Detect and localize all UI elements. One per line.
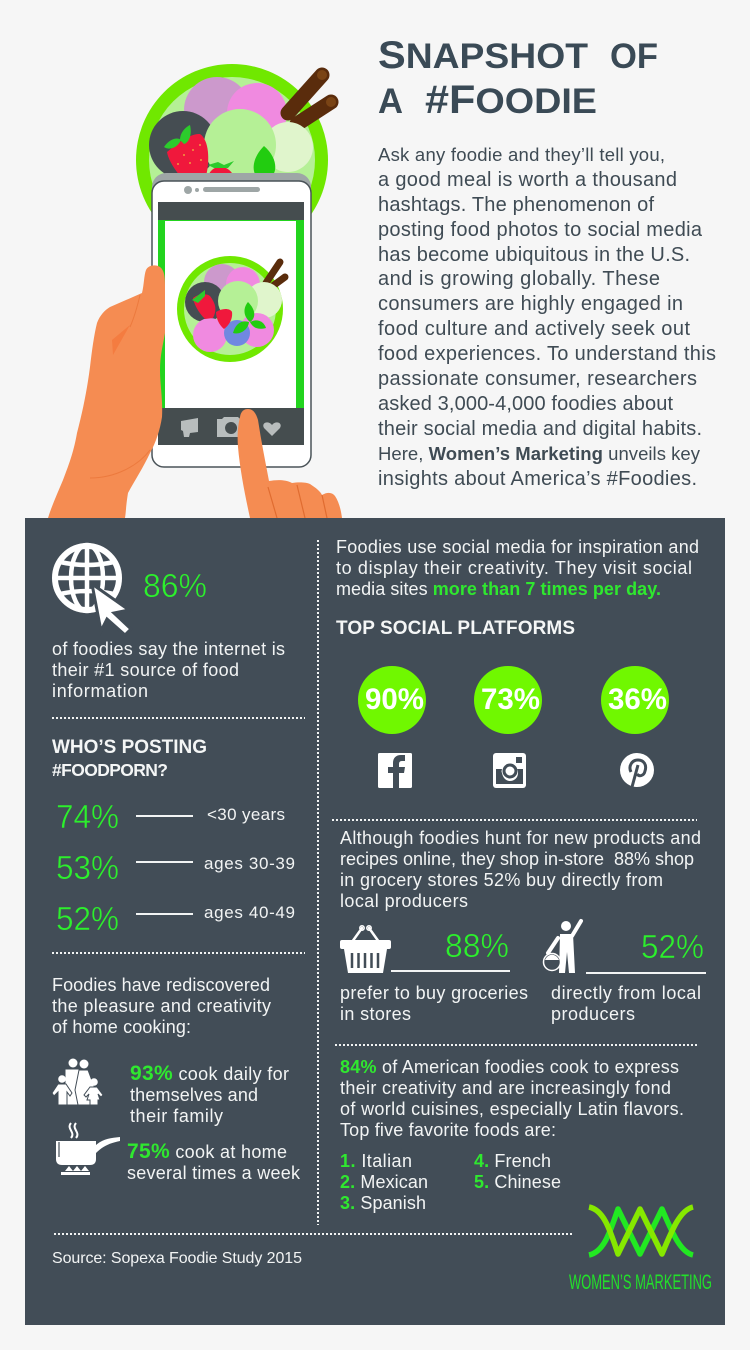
intro text: and is growing globally. These: [378, 268, 660, 290]
icon: pointing hand: [238, 409, 342, 518]
icon: Facebook: [378, 753, 412, 788]
text: 75% cook at home: [127, 1140, 301, 1183]
text: home cooking intro: of home cooking:: [52, 1017, 191, 1037]
panel: social media intro: media sites more than 7 times per day.: [336, 579, 661, 599]
icon: megaphone: [181, 418, 198, 437]
text: shopping intro: local producers: [340, 891, 468, 911]
heading: #FOODPORN?: [52, 760, 168, 780]
stat: ages 40-49: ages 40-49: [204, 903, 295, 922]
logo: Women's Marketing: [569, 1207, 712, 1294]
text: 75% cook at home: 75% cook at home: [127, 1140, 287, 1163]
stat: under 30: [56, 798, 285, 835]
intro text: their social media and digital habits.: [378, 418, 702, 440]
stat: 52% local producers: directly from local: [551, 983, 701, 1003]
icon: person with basket: [544, 921, 581, 973]
icon: cooking pot on flame: [56, 1123, 120, 1175]
intro text: asked 3,000-4,000 foodies about: [378, 393, 673, 415]
badge: Facebook 90%: [358, 666, 426, 734]
text: world cuisines: of world cuisines, especially Latin flavors.: [340, 1099, 684, 1119]
panel: who's posting: [52, 737, 295, 937]
stat: ages 30-39: ages 30-39: [204, 854, 295, 873]
text: home cooking intro: the pleasure and creativity: [52, 996, 271, 1016]
text: world cuisines: Top five favorite foods are:: [340, 1120, 556, 1140]
chart: social platform percentages: [358, 666, 669, 788]
title: [378, 34, 658, 122]
stat: 88% in stores: in stores: [340, 1004, 411, 1024]
text: 93% cook daily: 93% cook daily for: [130, 1062, 289, 1085]
badge: Pinterest 36%: 36%: [608, 683, 667, 716]
stat: ages 30-39: [56, 849, 295, 886]
heading: [52, 737, 207, 780]
panel: internet stat: [52, 545, 285, 701]
title: SNAPSHOT: [378, 34, 588, 77]
intro text: posting food photos to social media: [378, 219, 703, 241]
intro text: Here, Women’s Marketing unveils key: [378, 443, 701, 464]
badge: Instagram 73%: 73%: [481, 683, 540, 716]
list: top five foods: 5. Chinese: [474, 1172, 561, 1192]
stat: 88% in stores: 88%: [445, 927, 509, 964]
text: 93% cook daily: their family: [130, 1106, 223, 1126]
text: internet source: of foodies say the internet is: [52, 639, 285, 659]
title: OF: [610, 37, 658, 76]
text: shopping intro: [340, 828, 701, 911]
list: top five foods: 2. Mexican: [340, 1172, 428, 1192]
panel: dark stats background: [25, 518, 725, 1325]
stat: 88% in stores: prefer to buy groceries: [340, 983, 528, 1003]
panel: social media intro: to display their creativity. They visit social: [336, 558, 692, 578]
icon: food bowl: [136, 64, 336, 256]
intro text: a good meal is worth a thousand: [378, 169, 677, 191]
stat: 52% local producers: producers: [551, 1004, 635, 1024]
list: top five foods: 1. Italian: [340, 1151, 412, 1171]
text: internet source: their #1 source of food: [52, 660, 239, 680]
stat: 86%: 86%: [143, 567, 207, 604]
panel: shopping habits: [340, 828, 706, 1024]
icon: left hand: [48, 265, 165, 518]
text: home cooking intro: [52, 975, 271, 1037]
intro text: Ask any foodie and they’ll tell you,: [378, 144, 665, 165]
icon: heart: [263, 422, 281, 436]
stat: ages 40-49: 52%: [56, 900, 119, 937]
badge: Facebook 90%: 90%: [365, 683, 424, 716]
icon: Instagram: [493, 753, 526, 788]
text: internet source: information: [52, 681, 148, 701]
stat: 52% local producers: 52%: [641, 928, 704, 965]
title: #FOODIE: [425, 78, 597, 122]
text: internet source: [52, 639, 285, 701]
title: A: [378, 82, 403, 121]
text: shopping intro: Although foodies hunt for new products and: [340, 828, 701, 848]
intro text: consumers are highly engaged in: [378, 293, 683, 315]
text: world cuisines: [340, 1057, 684, 1140]
heading: top social platforms: TOP SOCIAL PLATFORMS: [336, 618, 575, 639]
text: 93% cook daily: themselves and: [130, 1085, 258, 1105]
logo mark: [589, 1207, 693, 1255]
source note: Source: Sopexa Foodie Study 2015: [52, 1250, 302, 1267]
panel: home cooking: [52, 975, 301, 1183]
badge: Instagram 73%: [474, 666, 542, 734]
panel: social media intro: [336, 537, 699, 599]
list: top five foods: 4. French: [474, 1151, 551, 1171]
illustration: hand holding phone photographing a food bowl: [48, 64, 342, 518]
stat: under 30: <30 years: [207, 805, 285, 824]
icon: globe with cursor: [55, 545, 131, 635]
stat: ages 40-49: [56, 900, 295, 937]
panel: social media intro: Foodies use social media for inspiration and: [336, 537, 699, 557]
heading: WHO’S POSTING: [52, 737, 207, 758]
text: shopping intro: in grocery stores 52% buy directly from: [340, 870, 663, 890]
intro text: passionate consumer, researchers: [378, 368, 697, 390]
text: 75% cook at home: several times a week: [127, 1163, 301, 1183]
intro text: has become ubiquitous in the U.S.: [378, 244, 690, 266]
list: top five foods: 3. Spanish: [340, 1193, 426, 1213]
icon: Pinterest: [620, 753, 654, 787]
text: world cuisines: their creativity and are increasingly fond: [340, 1078, 671, 1098]
icon: shopping basket: [340, 926, 391, 973]
stat: under 30: 74%: [56, 798, 119, 835]
stat: 52% local producers: [551, 928, 706, 1024]
badge: Pinterest 36%: [601, 666, 669, 734]
list: top five foods: [340, 1151, 561, 1213]
intro text: food experiences. To understand this: [378, 343, 716, 365]
text: shopping intro: recipes online, they shop in-store 88% shop: [340, 849, 694, 869]
icon: screen food photo: [177, 256, 285, 362]
panel: favorite foods: [340, 1057, 684, 1213]
stat: ages 30-39: 53%: [56, 849, 119, 886]
icon: family: [52, 1058, 103, 1105]
intro text: hashtags. The phenomenon of: [378, 194, 654, 216]
intro text: insights about America’s #Foodies.: [378, 468, 697, 490]
stat: 88% in stores: [340, 927, 528, 1024]
text: world cuisines: 84% of American foodies cook to express: [340, 1057, 679, 1077]
text: 93% cook daily: [130, 1062, 289, 1126]
intro text: food culture and actively seek out: [378, 318, 690, 340]
icon: camera: [217, 417, 246, 437]
icon: smartphone: [152, 173, 311, 467]
text: home cooking intro: Foodies have rediscovered: [52, 975, 270, 995]
intro text: [378, 144, 716, 490]
